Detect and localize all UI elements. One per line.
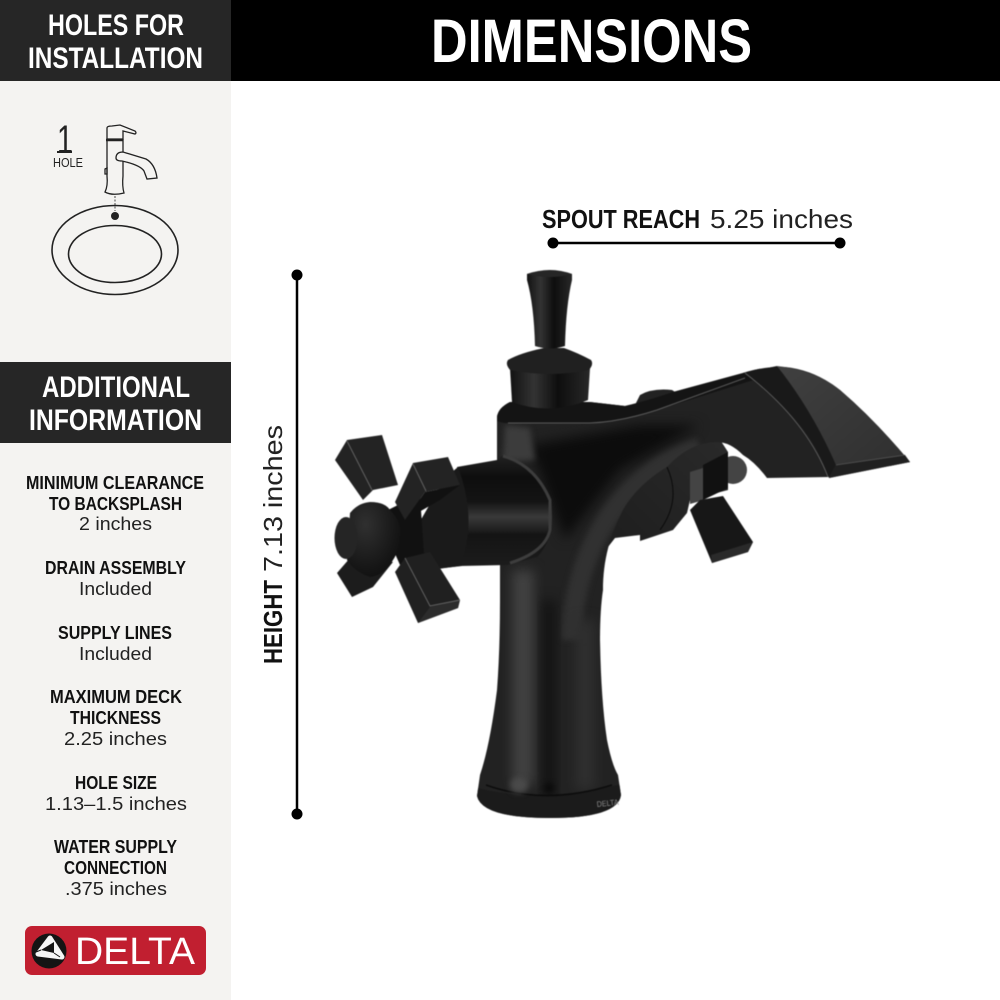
stopper collar	[510, 368, 590, 409]
spout band	[743, 366, 837, 478]
arm: top left	[335, 435, 398, 500]
height dimension	[258, 270, 302, 820]
spec: maximum deck thickness: MAXIMUM DECK	[50, 687, 182, 707]
header: holes for installation: INSTALLATION	[28, 42, 203, 75]
spec: minimum clearance	[26, 473, 204, 534]
arm: top front	[395, 457, 460, 520]
header: additional information: INFORMATION	[29, 404, 202, 437]
spec: drain assembly	[45, 558, 186, 599]
spec: maximum deck thickness: 2.25 inches	[64, 729, 167, 749]
spec: supply lines	[58, 623, 172, 664]
stem shading	[512, 570, 534, 785]
left cylinder	[457, 455, 552, 566]
spec: hole size	[45, 773, 187, 814]
spec: water supply connection: WATER SUPPLY	[54, 837, 177, 857]
handle hub	[417, 510, 463, 570]
spec: maximum deck thickness	[50, 687, 182, 749]
logo: delta: DELTA	[75, 931, 196, 973]
header: holes for installation	[0, 0, 231, 81]
icon: one hole faucet and basin: HOLE	[53, 156, 83, 170]
title: dimensions	[231, 0, 1000, 81]
spec: minimum clearance: MINIMUM CLEARANCE	[26, 473, 204, 493]
rear lever bump	[636, 390, 680, 410]
header: holes for installation: HOLES FOR	[48, 9, 184, 42]
spout reach dimension: SPOUT REACH	[542, 204, 700, 234]
base engraving: DELTA	[596, 798, 620, 809]
spec: hole size: 1.13–1.5 inches	[45, 794, 187, 814]
spec: hole size: HOLE SIZE	[75, 773, 157, 793]
left sidebar background	[0, 0, 231, 1000]
spec: water supply connection	[54, 837, 177, 899]
spout reach dimension: 5.25 inches	[710, 204, 853, 234]
spec: maximum deck thickness: THICKNESS	[70, 708, 161, 728]
arm: bottom left	[337, 558, 393, 597]
height dimension: 7.13 inches	[258, 425, 288, 572]
spec: supply lines: Included	[79, 644, 152, 664]
spec: minimum clearance: TO BACKSPLASH	[49, 494, 182, 514]
knob	[347, 502, 400, 577]
spout end face	[777, 366, 910, 478]
faucet body, stem and spout	[470, 360, 930, 830]
body shading	[534, 422, 690, 535]
spec: minimum clearance: 2 inches	[79, 514, 152, 534]
icon: one hole faucet and basin	[52, 118, 178, 294]
header: additional information: ADDITIONAL	[42, 371, 190, 404]
base rim	[476, 785, 622, 818]
header: additional information	[0, 362, 231, 443]
height dimension: HEIGHT	[258, 580, 288, 664]
stopper knob	[527, 270, 572, 348]
arm: bottom front	[395, 552, 460, 623]
spec: supply lines: SUPPLY LINES	[58, 623, 172, 643]
spec: water supply connection: CONNECTION	[64, 858, 167, 878]
left handle	[334, 435, 463, 623]
spec: drain assembly: Included	[79, 579, 152, 599]
faucet product image	[334, 270, 930, 830]
title: dimensions: DIMENSIONS	[431, 7, 752, 75]
spec: drain assembly: DRAIN ASSEMBLY	[45, 558, 186, 578]
rear handle	[590, 435, 753, 570]
spec: water supply connection: .375 inches	[65, 879, 167, 899]
icon: one hole faucet and basin: 1	[57, 118, 73, 162]
spout reach dimension	[542, 204, 853, 248]
top band of body	[496, 368, 760, 423]
logo: delta	[25, 926, 206, 975]
